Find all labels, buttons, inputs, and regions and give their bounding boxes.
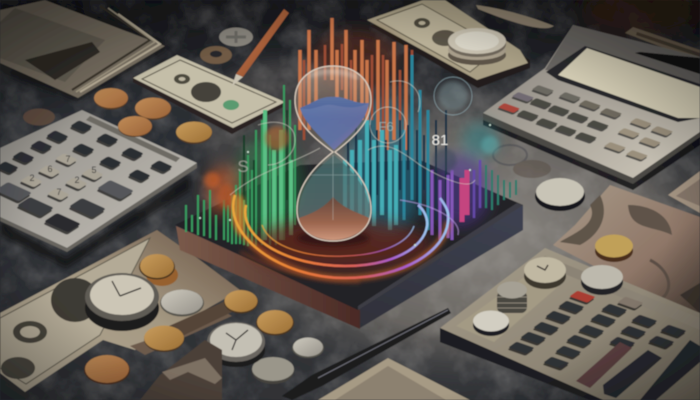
dollar bill: top centre left xyxy=(133,55,285,134)
calculator: top right xyxy=(483,25,700,190)
hologram glow xyxy=(206,30,498,240)
glass outline xyxy=(295,66,371,241)
key digits xyxy=(29,154,97,197)
hologram medallions xyxy=(265,81,499,172)
teal-green bars at right xyxy=(486,165,516,210)
feather pen: top right xyxy=(476,5,554,28)
hologram numbers: S xyxy=(237,157,249,176)
washer coin xyxy=(200,46,232,64)
orange bars xyxy=(300,18,412,150)
silver coin: right xyxy=(535,178,585,211)
bill: top right corner xyxy=(625,27,700,62)
sparks xyxy=(199,124,491,246)
teal bars xyxy=(345,55,428,230)
key digits: 5 xyxy=(91,165,97,175)
pocket clock: large xyxy=(85,273,159,331)
orange spark burst xyxy=(204,172,246,235)
brown sand xyxy=(299,197,369,240)
calculator: left xyxy=(0,110,197,268)
copper coins: top left group xyxy=(23,88,212,144)
colour rings on book xyxy=(233,195,458,282)
calculator: bottom right xyxy=(440,248,700,400)
folded bill: right xyxy=(553,185,700,313)
dark bars in the blue zone xyxy=(348,110,446,220)
key digits: 2 xyxy=(74,175,80,185)
purple bars xyxy=(432,160,480,240)
money stack: top left xyxy=(0,0,165,102)
glass body shadow xyxy=(297,230,369,246)
long keys xyxy=(576,340,700,400)
pocket clock: small xyxy=(207,322,265,367)
bottom scraps: brown bill xyxy=(140,340,222,400)
green bars xyxy=(186,85,295,246)
key digits: 7 xyxy=(56,187,62,197)
pen: bottom xyxy=(282,308,451,400)
grey coin xyxy=(219,28,253,46)
pen: top xyxy=(232,9,289,86)
dollar bills: top centre right with coin stack xyxy=(367,0,530,88)
hologram bars xyxy=(186,18,516,246)
lower bulb teal haze xyxy=(299,156,369,222)
book xyxy=(175,160,523,329)
faint stamps on table xyxy=(493,145,551,178)
bottom bill: centre xyxy=(318,358,470,400)
key digits: 7 xyxy=(65,154,71,164)
hourglass xyxy=(295,66,371,246)
key digits: 2 xyxy=(29,173,35,183)
coins on bottom calculator xyxy=(473,234,633,336)
orbit swirl lines xyxy=(230,77,475,195)
bill: right tiny xyxy=(668,171,700,213)
hologram numbers xyxy=(237,119,448,176)
key digits: 6 xyxy=(47,164,53,174)
hologram numbers: F6 xyxy=(378,119,394,134)
blue sand xyxy=(300,97,369,150)
hologram numbers: 81 xyxy=(432,132,448,149)
coins near clock xyxy=(84,254,324,384)
dollar bill: bottom left xyxy=(0,230,240,392)
